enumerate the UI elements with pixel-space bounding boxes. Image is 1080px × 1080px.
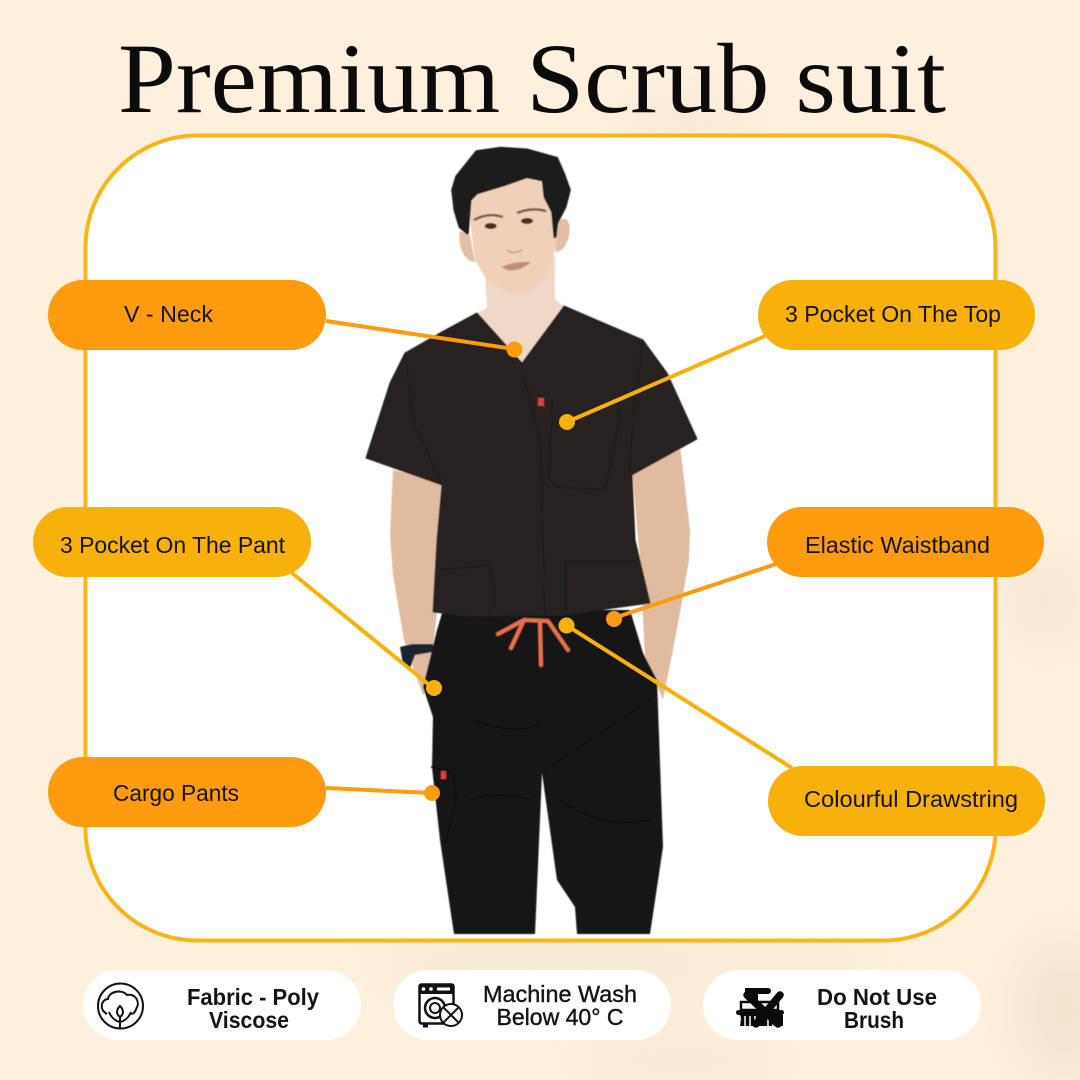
cargo pocket tag: [441, 771, 446, 779]
care card: fabric: Fabric - Poly: [187, 984, 319, 1010]
icon: cotton: [98, 984, 143, 1029]
face: [468, 177, 557, 294]
drawstring: [498, 620, 568, 665]
label: V - Neck: [48, 280, 326, 350]
callout dot: waistband: [606, 611, 622, 627]
callout line: V-Neck: [326, 321, 514, 349]
right arm: [632, 445, 690, 700]
label: Colourful Drawstring: Colourful Drawstring: [804, 786, 1018, 812]
watch: [400, 644, 433, 668]
label: Elastic Waistband: Elastic Waistband: [805, 532, 990, 558]
label: Cargo Pants: Cargo Pants: [113, 780, 239, 806]
ears: [459, 219, 570, 262]
pants folds and cargo pocket: [431, 700, 650, 845]
panel: product frame: [86, 136, 996, 940]
callout dot: drawstring: [558, 618, 574, 634]
care card: do not brush: [703, 970, 981, 1040]
label: Elastic Waistband: [767, 507, 1044, 577]
label: 3 Pocket On The Pant: [33, 507, 311, 577]
callout line: Cargo Pants: [326, 788, 432, 793]
pants: [423, 610, 663, 934]
label: Colourful Drawstring: [768, 766, 1045, 836]
icon: washing machine crossed: [419, 984, 462, 1028]
left arm: [390, 470, 442, 695]
facial features: [474, 209, 546, 270]
scrub top: [366, 306, 697, 616]
care card: machine wash: Below 40° C: [496, 1004, 624, 1030]
callout dot: V-Neck: [506, 342, 522, 358]
callout line: Colourful Drawstring: [566, 625, 792, 768]
callout line: 3 Pocket On The Pant: [292, 573, 433, 688]
scrub top seams and pockets: [405, 340, 643, 615]
callout line: 3 Pocket On The Top: [567, 336, 765, 422]
care card: do not brush: Do Not Use: [817, 984, 937, 1010]
icon: crossed brush: [736, 988, 784, 1026]
label: Cargo Pants: [48, 757, 326, 827]
neck: [477, 255, 564, 363]
callout dot: pocket top: [559, 414, 575, 430]
callout dot: cargo: [424, 785, 440, 801]
hair: [453, 148, 569, 237]
chest logo tag: [538, 398, 544, 406]
title: Premium Scrub suit: [118, 23, 946, 134]
care card: machine wash: Machine Wash: [483, 981, 637, 1007]
callout dot: pocket pant: [426, 680, 442, 696]
care card: fabric: [83, 970, 361, 1040]
care card: machine wash: [393, 970, 671, 1040]
care card: fabric: Viscose: [209, 1007, 289, 1033]
callout line: Elastic Waistband: [614, 564, 776, 618]
model photo illustration: [366, 148, 697, 934]
label: 3 Pocket On The Top: 3 Pocket On The Top: [785, 301, 1001, 327]
care card: do not brush: Brush: [844, 1007, 904, 1033]
label: 3 Pocket On The Pant: 3 Pocket On The Pant: [60, 532, 286, 558]
label: 3 Pocket On The Top: [758, 280, 1035, 350]
label: V - Neck: V - Neck: [124, 301, 213, 327]
